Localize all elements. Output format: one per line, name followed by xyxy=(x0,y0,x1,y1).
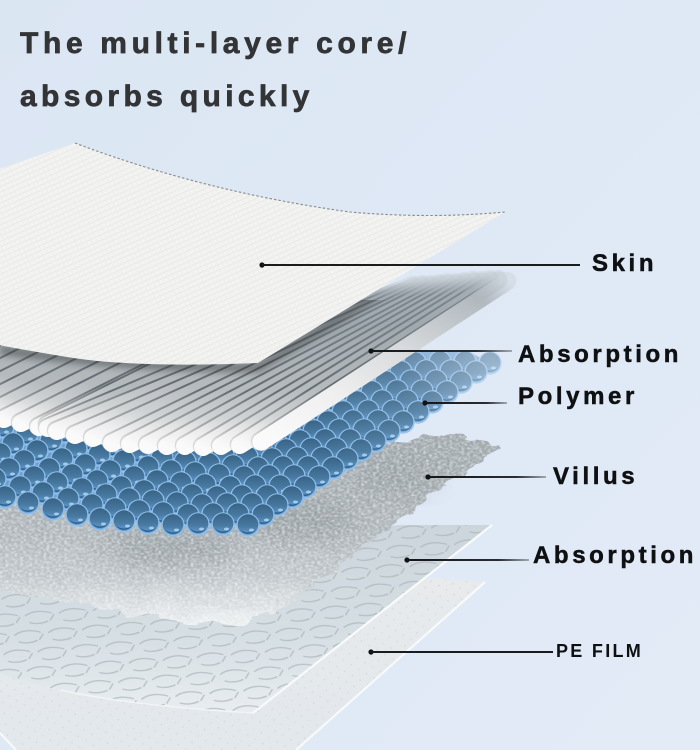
layer: villus fibre xyxy=(0,435,500,625)
leader: absorption xyxy=(368,348,512,354)
layer: lower absorption sheet xyxy=(0,525,492,713)
leader: lower absorption xyxy=(404,557,529,563)
skin layer shadow xyxy=(0,278,405,368)
label: absorption: Absorption xyxy=(518,341,682,368)
layer: PE film xyxy=(0,578,485,750)
label: PE film: PE FILM xyxy=(556,641,643,661)
leader: polymer xyxy=(422,400,507,406)
label: polymer: Polymer xyxy=(518,383,638,410)
leader: villus xyxy=(425,474,546,480)
layer: polymer beads xyxy=(0,350,502,537)
title: absorbs quickly xyxy=(20,80,314,113)
label: villus: Villus xyxy=(553,463,638,490)
label: skin: Skin xyxy=(592,250,657,277)
leader: skin xyxy=(259,262,580,268)
label: lower absorption: Absorption xyxy=(533,542,697,569)
title: The multi-layer core/ xyxy=(20,27,411,60)
layer: skin sheet xyxy=(0,143,505,365)
leader: PE film xyxy=(368,649,553,655)
title xyxy=(20,27,411,113)
layer: upper absorption cylinders xyxy=(0,279,507,450)
